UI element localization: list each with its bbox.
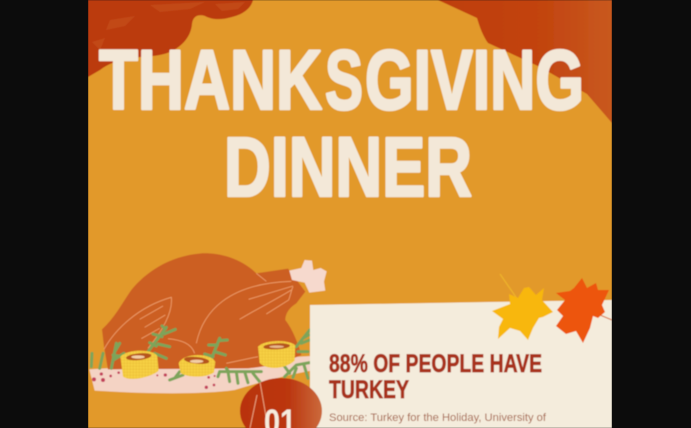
decoration: top left blob [88,0,253,77]
panel: orange background [88,0,612,428]
illustration: turkey platter [89,253,327,393]
panel: fact card [310,300,612,428]
turkey outlines [104,273,293,363]
title: THANK [99,33,322,127]
infographic canvas [88,0,612,428]
title: S [325,33,363,127]
decoration: top right blob [438,0,612,123]
platter [89,356,311,393]
icon: yellow maple leaf [492,274,553,340]
drumstick bone [289,260,327,293]
heading: 88% of people have turkey: 88% OF PEOPLE HAVE [329,350,542,378]
heading: 88% of people have turkey [328,353,542,399]
turkey body [102,253,305,369]
badge: number 01 [240,378,322,428]
corn right [258,341,295,368]
title: DINNER [224,120,472,214]
berries [92,371,216,389]
title [98,48,582,198]
title: GIVING [365,33,584,127]
corn middle [179,355,215,377]
greenery [91,326,310,383]
heading: 88% of people have turkey: TURKEY [329,376,409,404]
source text: Source: Turkey for the Holiday, University of [329,412,547,424]
corn left [120,351,159,379]
icon: orange maple leaf [556,278,612,343]
